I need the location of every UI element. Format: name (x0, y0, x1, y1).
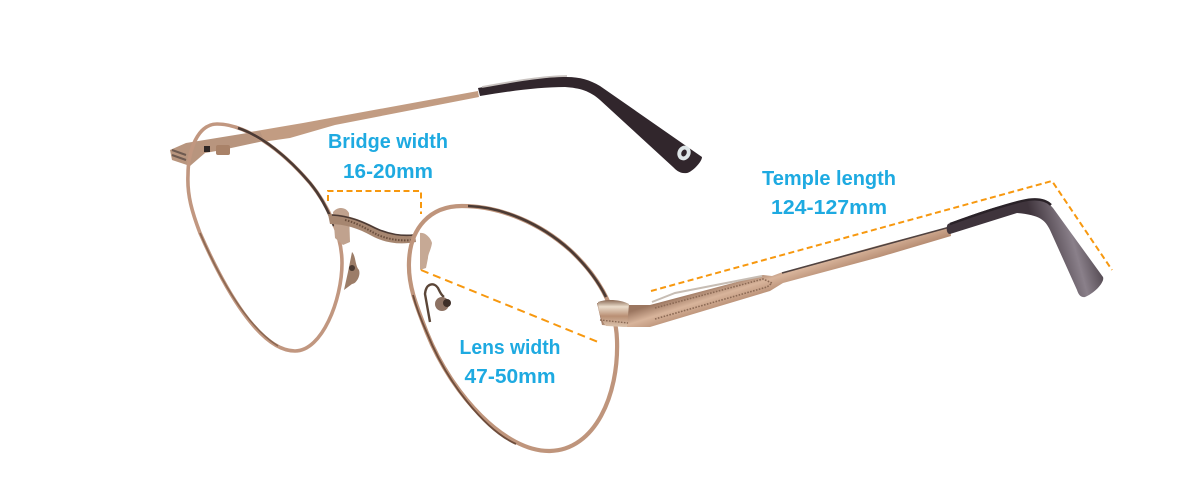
label: temple length: 124-127mm (771, 197, 887, 219)
right nose pad (420, 233, 451, 322)
label: temple length: Temple length (762, 168, 896, 190)
near temple arm (597, 227, 951, 327)
far temple arm (250, 76, 702, 173)
dimension line: lens width (421, 270, 598, 342)
label: temple length (762, 168, 896, 219)
near temple ear tip (947, 199, 1103, 297)
label: lens width: 47-50mm (464, 366, 556, 388)
left nose pad (333, 208, 359, 290)
label: bridge width: 16-20mm (343, 161, 433, 183)
far hinge (170, 131, 264, 166)
label: lens width (460, 337, 560, 388)
bridge (328, 214, 416, 243)
label: bridge width: Bridge width (328, 131, 448, 153)
far temple ear tip (478, 76, 702, 173)
dimension line: temple length (651, 181, 1112, 291)
left lens rim (188, 124, 342, 351)
label: lens width: Lens width (460, 337, 560, 359)
dimension line: bridge width (328, 191, 421, 214)
right lens rim (409, 206, 617, 451)
label: bridge width (328, 131, 448, 183)
hinge block (598, 300, 629, 327)
